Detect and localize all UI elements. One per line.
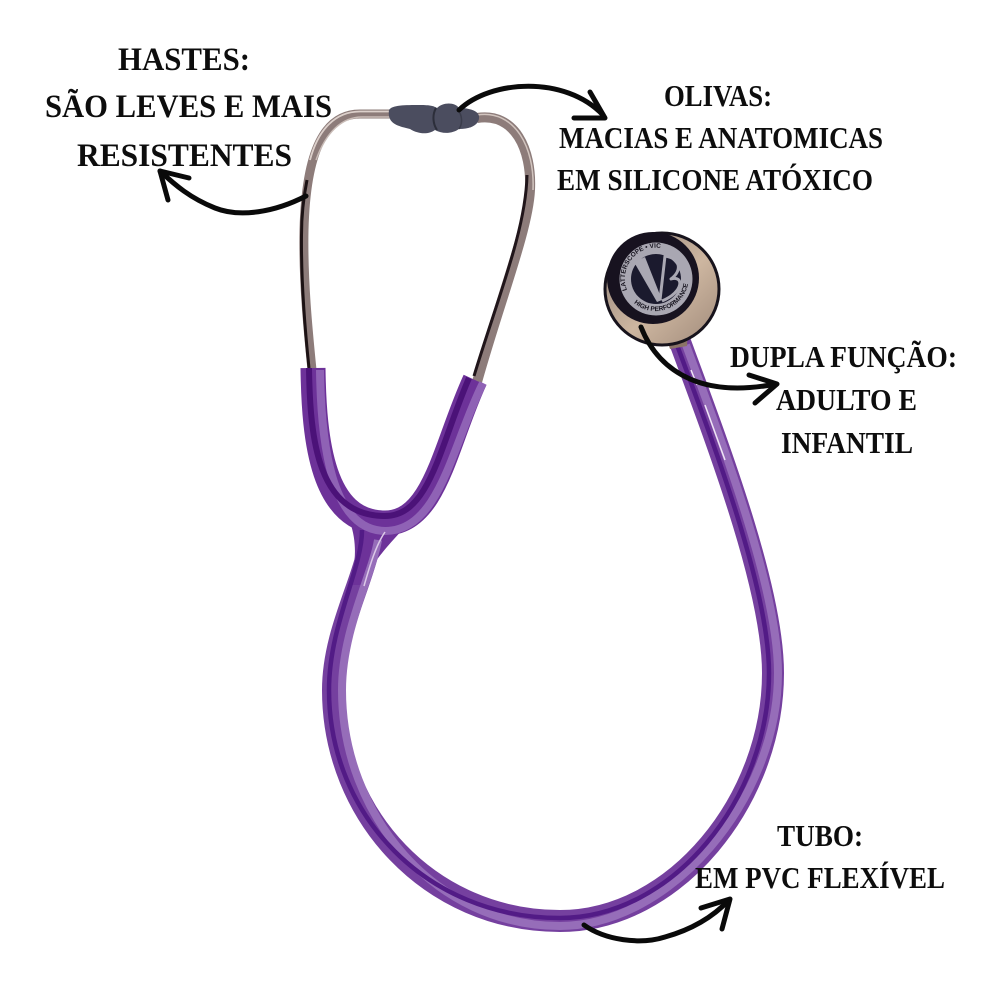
label: hastes: RESISTENTES <box>77 138 292 174</box>
metal headset tubes <box>301 112 533 382</box>
highlights <box>364 532 385 586</box>
yoke base <box>313 368 475 523</box>
tube highlight <box>342 345 778 926</box>
ear olives <box>389 104 479 133</box>
yoke dark line <box>309 368 469 516</box>
label: dupla função: INFANTIL <box>781 425 913 460</box>
purple tube and Y yoke <box>309 342 778 926</box>
arrow: hastes <box>160 171 306 213</box>
chest piece: HIGH PERFORMANCE <box>634 283 688 312</box>
label: hastes: SÃO LEVES E MAIS <box>45 88 332 125</box>
label: tubo: TUBO: <box>777 818 863 853</box>
ring text: LATTERSCOPE • VIC <box>620 243 661 292</box>
tube dark line <box>329 345 769 918</box>
stethoscope <box>299 104 784 932</box>
label: hastes <box>45 42 332 174</box>
label: tubo <box>695 818 945 895</box>
logo mark <box>634 257 662 302</box>
label: dupla função <box>730 339 957 460</box>
label: olivas: EM SILICONE ATÓXICO <box>557 162 873 197</box>
black rim <box>607 232 699 324</box>
arrow: dupla função <box>641 327 777 403</box>
yoke highlight <box>320 370 483 531</box>
arrow: tubo <box>584 899 730 941</box>
label: tubo: EM PVC FLEXÍVEL <box>695 860 945 895</box>
label: olivas: OLIVAS: <box>664 78 772 113</box>
junction <box>350 522 404 585</box>
metal neck <box>662 325 688 349</box>
arrow: olivas <box>459 86 605 118</box>
label: olivas <box>557 78 883 197</box>
long tube base <box>333 342 773 921</box>
label: olivas: MACIAS E ANATOMICAS <box>559 120 883 155</box>
label: hastes: HASTES: <box>118 42 250 78</box>
bell <box>605 233 719 345</box>
chest piece <box>604 232 720 349</box>
label: dupla função: ADULTO E <box>776 382 917 417</box>
label: dupla função: DUPLA FUNÇÃO: <box>730 339 957 374</box>
